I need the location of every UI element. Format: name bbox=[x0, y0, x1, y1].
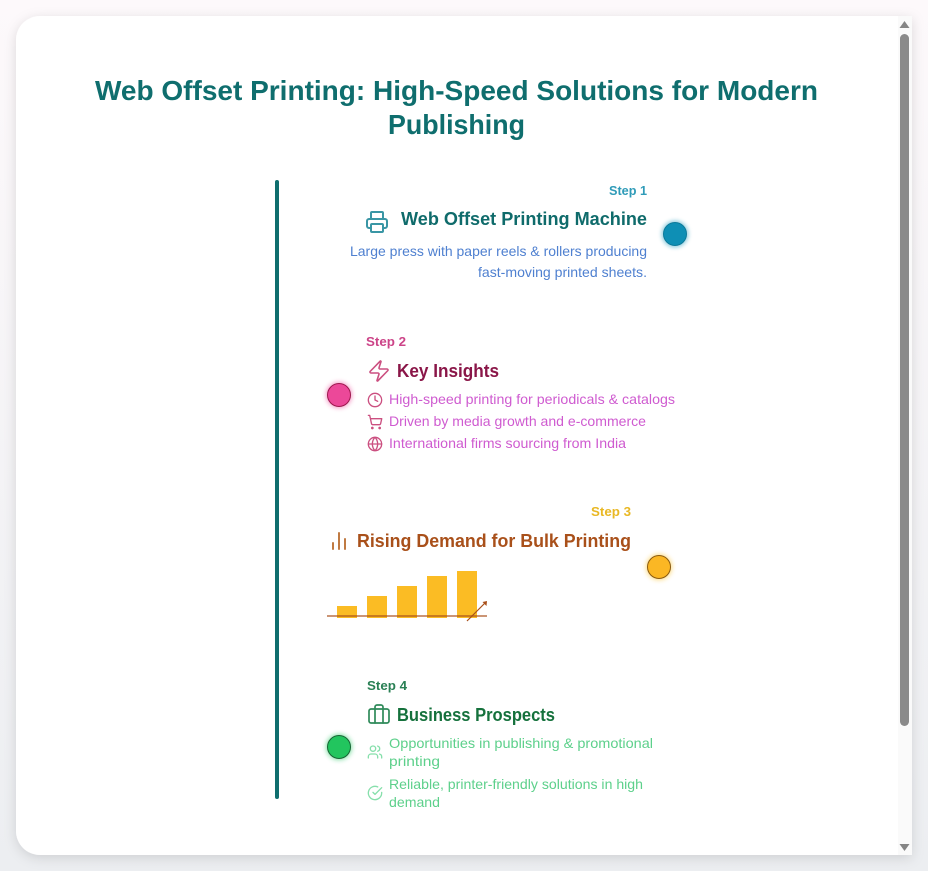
icon: printer bbox=[367, 212, 387, 232]
icon: zap bbox=[370, 361, 388, 381]
step 2 label: Step 2 bbox=[366, 334, 406, 349]
step 4 heading: Business Prospects bbox=[397, 705, 555, 725]
icon: briefcase bbox=[369, 705, 389, 723]
icon: bar chart bbox=[333, 533, 345, 549]
step 4 panel bbox=[367, 678, 653, 810]
list item: reliable: Reliable, printer-friendly solutions in high bbox=[389, 776, 643, 792]
step 1 description: Large press with paper reels & rollers producing bbox=[350, 243, 647, 259]
step 1 description: fast-moving printed sheets. bbox=[478, 264, 647, 280]
step 3 heading: Rising Demand for Bulk Printing bbox=[357, 531, 631, 551]
step 1 panel bbox=[350, 183, 647, 280]
step 3 dot bbox=[646, 554, 672, 580]
list item: opportunities: printing bbox=[389, 753, 440, 769]
step 4 label: Step 4 bbox=[367, 678, 408, 693]
title: Web Offset Printing: High-Speed Solutions for Modern bbox=[95, 75, 818, 106]
step 3 panel bbox=[327, 504, 631, 621]
list item: growth: Driven by media growth and e-commerce bbox=[389, 413, 646, 429]
title: Publishing bbox=[388, 109, 525, 140]
step 2 heading: Key Insights bbox=[397, 361, 499, 381]
scrollbar bbox=[898, 16, 912, 855]
step 1 heading: Web Offset Printing Machine bbox=[401, 209, 647, 229]
step 4 dot bbox=[326, 734, 352, 760]
list item: opportunities: Opportunities in publishing & promotional bbox=[389, 735, 653, 751]
list item: reliable bbox=[368, 776, 643, 810]
step 3 label: Step 3 bbox=[591, 504, 631, 519]
list item: reliable: demand bbox=[389, 794, 440, 810]
title bbox=[95, 75, 818, 140]
step 1 description bbox=[350, 243, 647, 280]
timeline line bbox=[275, 180, 279, 799]
list item: speed: High-speed printing for periodicals & catalogs bbox=[389, 391, 675, 407]
list item: international: International firms sourcing from India bbox=[389, 435, 626, 451]
bar chart bbox=[327, 571, 487, 621]
step 1 label: Step 1 bbox=[609, 183, 647, 198]
step 2 dot bbox=[326, 382, 352, 408]
step 1 dot bbox=[662, 221, 688, 247]
list item: opportunities bbox=[368, 735, 653, 769]
step 2 panel bbox=[366, 334, 675, 451]
